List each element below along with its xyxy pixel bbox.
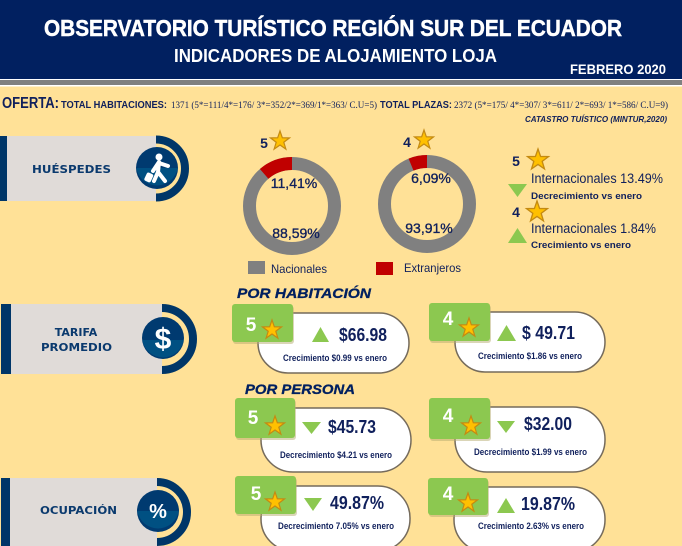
card: persona 4 stars: $32.00: [524, 413, 572, 434]
donut chart: 5 stars: [250, 131, 334, 248]
card: habitación 5 stars: Crecimiento $0.99 vs enero: [283, 353, 388, 363]
legend: [248, 261, 461, 276]
supply summary line: TOTAL PLAZAS:: [380, 99, 452, 111]
card: ocupación 4 stars: Crecimiento 2.63% vs enero: [478, 521, 585, 531]
section label: huéspedes: [0, 136, 185, 201]
supply summary line: 1371 (5*=111/4*=176/ 3*=352/2*=369/1*=363/ C.U=5): [171, 100, 377, 110]
international guests: 5 stars: 5: [512, 153, 520, 169]
card: ocupación 4 stars: 4: [443, 484, 454, 505]
heading: por persona: POR PERSONA: [245, 381, 355, 397]
card: habitación 4 stars: [429, 303, 605, 372]
donut chart: 4 stars: [384, 130, 470, 246]
card: ocupación 4 stars: 19.87%: [521, 493, 575, 514]
international guests: 4 stars: Internacionales 1.84%: [531, 221, 656, 236]
card: persona 4 stars: 4: [443, 406, 454, 427]
supply summary line: TOTAL HABITACIONES:: [61, 99, 167, 111]
section label: tarifa promedio: PROMEDIO: [41, 341, 112, 354]
card: persona 4 stars: [429, 398, 605, 472]
donut chart: 4 stars: 4: [403, 134, 411, 150]
card: persona 5 stars: 5: [248, 408, 259, 429]
donut chart: 5 stars: 5: [260, 135, 268, 151]
international guests: 5 stars: Decrecimiento vs enero: [531, 191, 642, 202]
header banner: [0, 0, 682, 86]
card: ocupación 5 stars: Decrecimiento 7.05% vs enero: [278, 521, 395, 531]
card: habitación 4 stars: $ 49.71: [522, 322, 575, 343]
icon: dollar sign: $: [155, 323, 172, 356]
supply summary line: [2, 95, 668, 112]
donut chart: 5 stars: 88,59%: [272, 225, 320, 241]
card: persona 5 stars: [235, 398, 411, 472]
card: habitación 4 stars: 4: [443, 309, 454, 330]
heading: por habitación: POR HABITACIÓN: [237, 284, 372, 301]
supply summary line: OFERTA:: [2, 95, 59, 112]
international guests: 4 stars: [508, 201, 656, 251]
international guests: 5 stars: Internacionales 13.49%: [531, 171, 663, 186]
card: habitación 5 stars: [232, 304, 409, 373]
card: ocupación 5 stars: [235, 476, 410, 546]
section label: tarifa promedio: TARIFA: [55, 326, 98, 339]
card: habitación 5 stars: $66.98: [339, 324, 387, 345]
section label: tarifa promedio: [1, 304, 193, 374]
international guests: 5 stars: [508, 149, 663, 202]
international guests: 4 stars: Crecimiento vs enero: [531, 240, 631, 251]
card: habitación 5 stars: 5: [246, 315, 257, 336]
legend: Nacionales: [271, 262, 327, 276]
international guests: 4 stars: 4: [512, 204, 520, 220]
section label: ocupación: [1, 478, 187, 546]
card: ocupación 5 stars: 5: [251, 484, 262, 505]
icon: percent sign: %: [149, 501, 167, 523]
donut chart: 5 stars: 11,41%: [271, 175, 317, 191]
date: FEBRERO 2020: [570, 61, 666, 77]
section label: huéspedes: HUÉSPEDES: [32, 163, 111, 176]
donut chart: 4 stars: 6,09%: [411, 170, 451, 186]
card: ocupación 5 stars: 49.87%: [330, 492, 384, 513]
card: persona 5 stars: $45.73: [328, 416, 376, 437]
card: persona 4 stars: Decrecimiento $1.99 vs enero: [474, 447, 588, 457]
section label: ocupación: OCUPACIÓN: [40, 504, 117, 517]
card: ocupación 4 stars: [428, 478, 605, 546]
card: persona 5 stars: Decrecimiento $4.21 vs enero: [280, 450, 393, 460]
source note: CATASTRO TUÍSTICO (MINTUR,2020): [525, 114, 667, 124]
donut chart: 4 stars: 93,91%: [405, 220, 453, 236]
supply summary line: 2372 (5*=175/ 4*=307/ 3*=611/ 2*=693/ 1*=586/ C.U=9): [454, 100, 668, 110]
legend: Extranjeros: [404, 261, 461, 275]
icon: traveller with suitcase: [144, 154, 168, 183]
subtitle: INDICADORES DE ALOJAMIENTO LOJA: [174, 45, 497, 66]
card: habitación 4 stars: Crecimiento $1.86 vs enero: [478, 351, 583, 361]
title: OBSERVATORIO TURÍSTICO REGIÓN SUR DEL ECUADOR: [44, 14, 622, 41]
